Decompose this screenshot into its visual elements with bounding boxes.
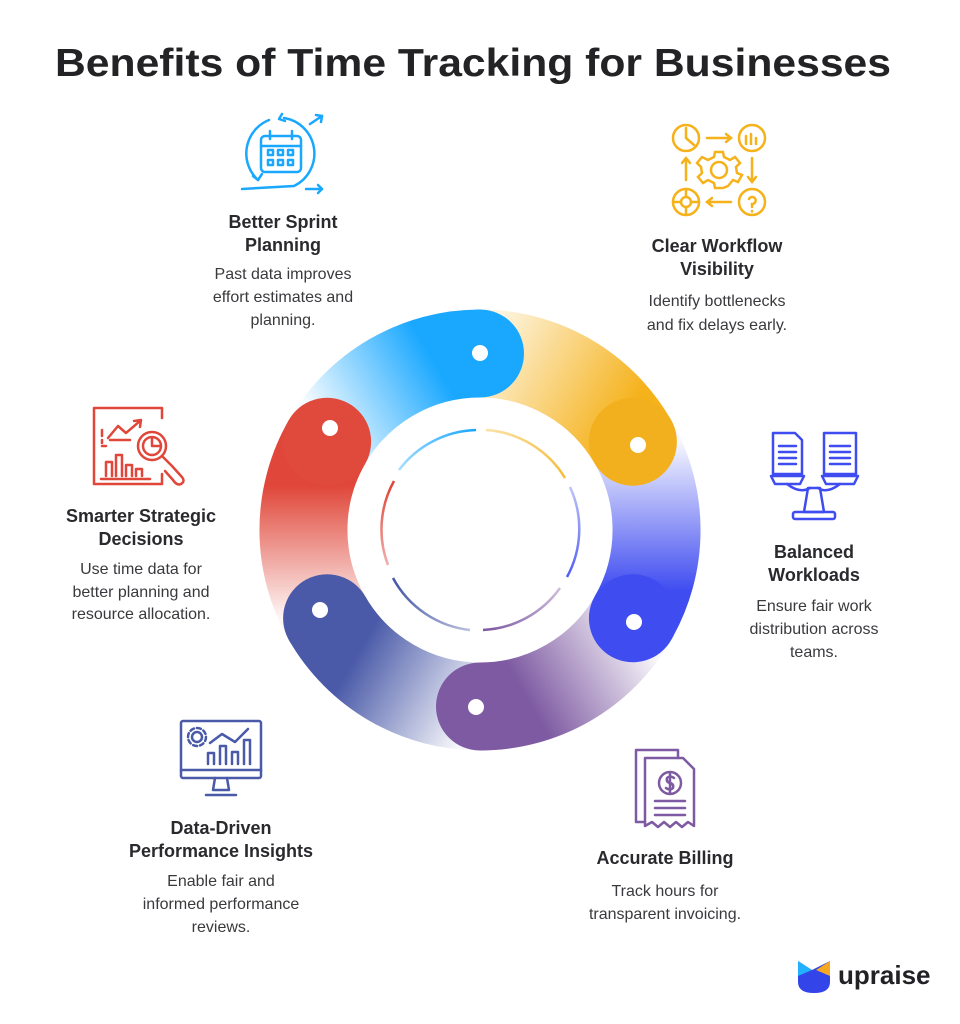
- text: Data-Driven Performance Insights: [129, 818, 313, 936]
- icon: calendar cycle: [242, 114, 322, 193]
- logo: upraise: upraise: [838, 960, 930, 990]
- text: Smarter Strategic Decisions: Smarter Strategic: [66, 506, 216, 526]
- cycle ring chart: [283, 310, 677, 750]
- text: Smarter Strategic Decisions: Decisions: [98, 529, 184, 549]
- logo: upraise: [798, 960, 930, 993]
- text: Better Sprint Planning: [213, 212, 353, 329]
- text: Balanced Workloads: Ensure fair work: [756, 598, 873, 615]
- text: Smarter Strategic Decisions: [66, 506, 216, 623]
- text: Better Sprint Planning: effort estimates and: [213, 289, 353, 306]
- text: Accurate Billing: transparent invoicing.: [589, 906, 741, 923]
- text: Balanced Workloads: teams.: [790, 644, 838, 661]
- text: Clear Workflow Visibility: Identify bottlenecks: [649, 293, 785, 310]
- text: Data-Driven Performance Insights: reviews.: [192, 919, 250, 936]
- icon: invoice document: [636, 750, 694, 827]
- text: Smarter Strategic Decisions: Use time data for: [80, 561, 203, 578]
- text: Data-Driven Performance Insights: Performance Insights: [129, 841, 313, 861]
- text: Data-Driven Performance Insights: Data-Driven: [170, 818, 272, 838]
- text: Clear Workflow Visibility: and fix delays early.: [647, 317, 787, 334]
- text: Clear Workflow Visibility: Clear Workflow: [652, 236, 783, 256]
- text: Balanced Workloads: distribution across: [750, 621, 878, 638]
- text: Clear Workflow Visibility: [647, 236, 787, 334]
- text: Better Sprint Planning: planning.: [251, 312, 315, 329]
- text: Accurate Billing: Track hours for: [612, 883, 719, 900]
- text: Balanced Workloads: Balanced: [774, 542, 854, 562]
- icon: chart with magnifier: [94, 408, 184, 484]
- text: Smarter Strategic Decisions: resource allocation.: [72, 606, 210, 623]
- text: Better Sprint Planning: Planning: [245, 235, 321, 255]
- text: Data-Driven Performance Insights: informed performance: [143, 896, 299, 913]
- text: Accurate Billing: Accurate Billing: [596, 848, 734, 868]
- text: Accurate Billing: [589, 848, 741, 923]
- icon: balance with documents: [771, 433, 858, 519]
- text: Data-Driven Performance Insights: Enable fair and: [167, 873, 275, 890]
- text: Better Sprint Planning: Better Sprint: [228, 212, 338, 232]
- icon: workflow gears: [673, 125, 765, 215]
- text: Clear Workflow Visibility: Visibility: [680, 259, 754, 279]
- icon: monitor with chart: [181, 721, 261, 795]
- text: Balanced Workloads: [750, 542, 878, 661]
- text: Balanced Workloads: Workloads: [768, 565, 860, 585]
- text: Smarter Strategic Decisions: better planning and: [72, 584, 210, 601]
- title: Benefits of Time Tracking for Businesses: [55, 42, 891, 85]
- text: Better Sprint Planning: Past data improves: [215, 266, 351, 283]
